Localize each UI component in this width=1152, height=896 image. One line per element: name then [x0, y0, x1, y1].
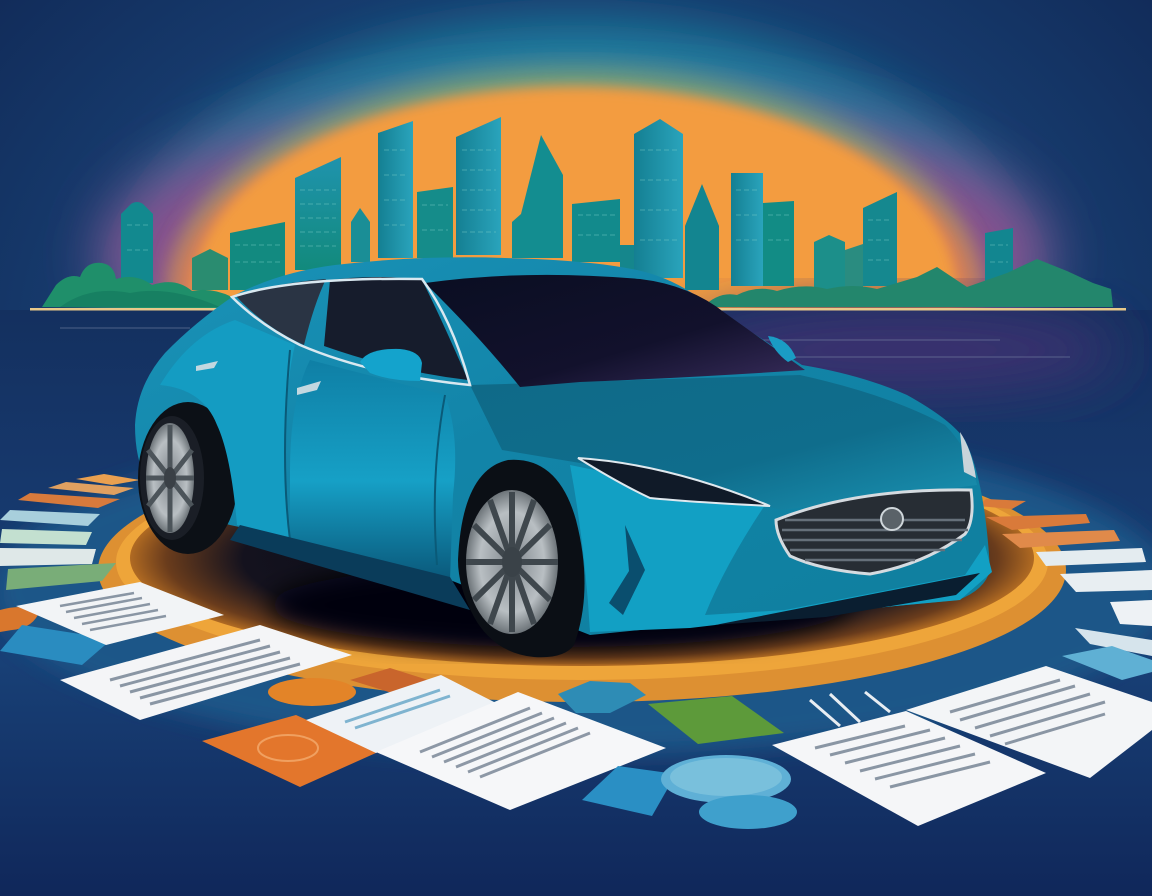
- orange medallion: [268, 678, 356, 706]
- car body: [135, 257, 990, 635]
- car: [135, 257, 992, 657]
- window trim: [232, 279, 470, 385]
- rear wheel: [138, 402, 238, 554]
- door handles: [196, 361, 321, 395]
- door line: [285, 350, 445, 565]
- sill shadow: [230, 525, 470, 610]
- document: [16, 582, 224, 645]
- city skyline: [121, 117, 1013, 290]
- side window rear: [236, 279, 326, 345]
- headlight: [578, 458, 770, 506]
- mirror: [360, 349, 422, 381]
- documents and cards, right: [772, 499, 1152, 826]
- document: [60, 625, 352, 720]
- orange card: [202, 715, 378, 787]
- windshield: [425, 275, 805, 387]
- purple water reflection: [680, 305, 1120, 395]
- rear side panel: [160, 320, 295, 537]
- side window front: [324, 277, 468, 380]
- trees and shoreline: [30, 259, 1126, 357]
- front-left vent: [609, 525, 645, 615]
- blue halo around ring: [0, 425, 1152, 755]
- front air intake: [715, 573, 980, 625]
- water and ground: [0, 310, 1152, 896]
- grille: [776, 490, 972, 574]
- front wheel: [458, 460, 585, 657]
- left stack cards: [76, 474, 140, 485]
- sunset glow: [100, 25, 1050, 555]
- lower bumper front: [570, 465, 992, 632]
- hood: [470, 375, 977, 510]
- orange ring around car: [98, 438, 1066, 702]
- documents and cards, bottom centre: [306, 675, 890, 829]
- door panel: [290, 360, 455, 580]
- car shadow: [270, 563, 850, 647]
- skyline windows: [127, 150, 1008, 262]
- documents and cards, left: [0, 474, 428, 787]
